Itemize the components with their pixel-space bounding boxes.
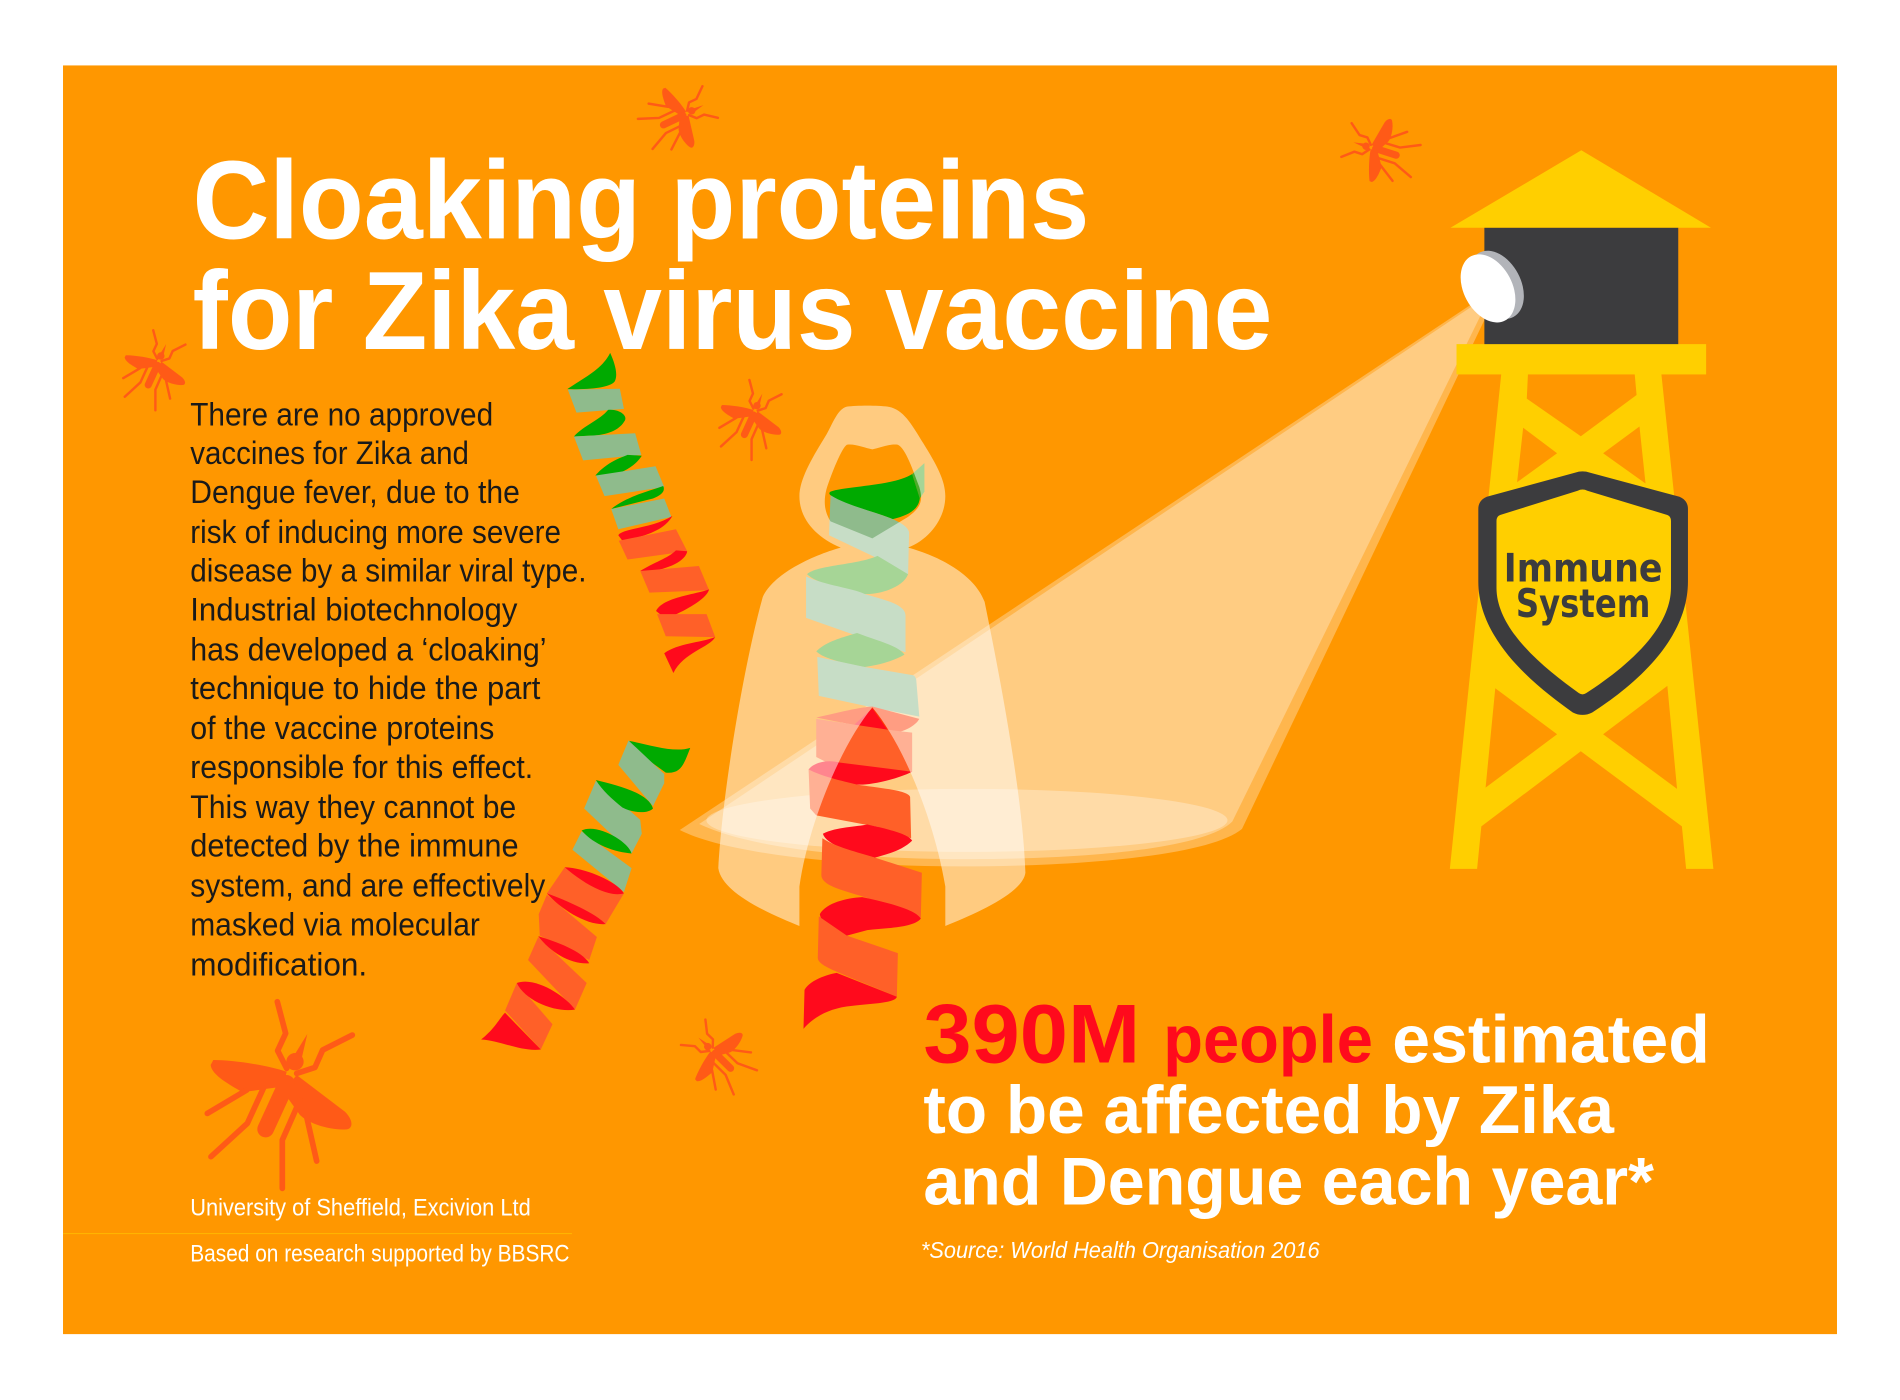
key statistic bbox=[923, 987, 1710, 1219]
tower legs and braces bbox=[1450, 373, 1713, 869]
body text: disease by a similar viral type. bbox=[190, 553, 586, 589]
helix: upper left protein bbox=[567, 353, 715, 673]
title: Cloaking proteins bbox=[193, 138, 1089, 263]
mosquito: centre bbox=[719, 380, 782, 460]
credits: Based on research supported by BBSRC bbox=[190, 1241, 570, 1267]
mosquito: top centre bbox=[628, 67, 727, 168]
body text: modification. bbox=[190, 946, 367, 982]
body text: masked via molecular bbox=[190, 906, 480, 942]
key statistic: and Dengue each year* bbox=[923, 1144, 1655, 1219]
key statistic: 390M bbox=[923, 987, 1140, 1081]
watchtower bbox=[1450, 150, 1713, 869]
body text: This way they cannot be bbox=[190, 789, 516, 825]
tower platform bbox=[1457, 344, 1706, 374]
key statistic: estimated bbox=[1392, 1003, 1710, 1078]
tower roof bbox=[1450, 150, 1711, 228]
mosquito: large bbox=[207, 1002, 352, 1188]
cloak figure bbox=[718, 406, 1025, 926]
immune system shield bbox=[1478, 471, 1688, 715]
body text: Dengue fever, due to the bbox=[190, 474, 520, 510]
body text: system, and are effectively bbox=[190, 868, 545, 904]
body text: responsible for this effect. bbox=[190, 749, 533, 785]
mosquito: left bbox=[123, 330, 185, 410]
credits: University of Sheffield, Excivion Ltd bbox=[190, 1195, 531, 1221]
tower cabin bbox=[1484, 228, 1678, 345]
shield label: Immune bbox=[1504, 547, 1662, 592]
body text bbox=[190, 396, 586, 982]
mosquito: bottom centre bbox=[671, 1015, 767, 1101]
key statistic: to be affected by Zika bbox=[923, 1073, 1615, 1148]
body text: Industrial biotechnology bbox=[190, 591, 517, 627]
body text: has developed a ‘cloaking’ bbox=[190, 631, 546, 667]
body text: detected by the immune bbox=[190, 828, 519, 864]
title bbox=[193, 138, 1272, 373]
body text: risk of inducing more severe bbox=[190, 514, 561, 550]
spotlight beam bbox=[680, 298, 1486, 866]
spotlight lamp bbox=[1450, 241, 1535, 332]
body text: of the vaccine proteins bbox=[190, 710, 494, 746]
mosquito: top right bbox=[1337, 115, 1424, 187]
helix: central protein under cloak bbox=[803, 463, 924, 1029]
body text: vaccines for Zika and bbox=[190, 435, 469, 471]
shield label bbox=[1504, 547, 1662, 627]
body text: There are no approved bbox=[190, 396, 493, 432]
body text: technique to hide the part bbox=[190, 670, 540, 706]
helix: lower left protein bbox=[481, 740, 690, 1050]
credits bbox=[63, 1195, 572, 1267]
key statistic: people bbox=[1163, 1003, 1373, 1078]
shield label: System bbox=[1516, 582, 1650, 627]
title: for Zika virus vaccine bbox=[193, 248, 1272, 373]
source note: *Source: World Health Organisation 2016 bbox=[921, 1237, 1320, 1263]
